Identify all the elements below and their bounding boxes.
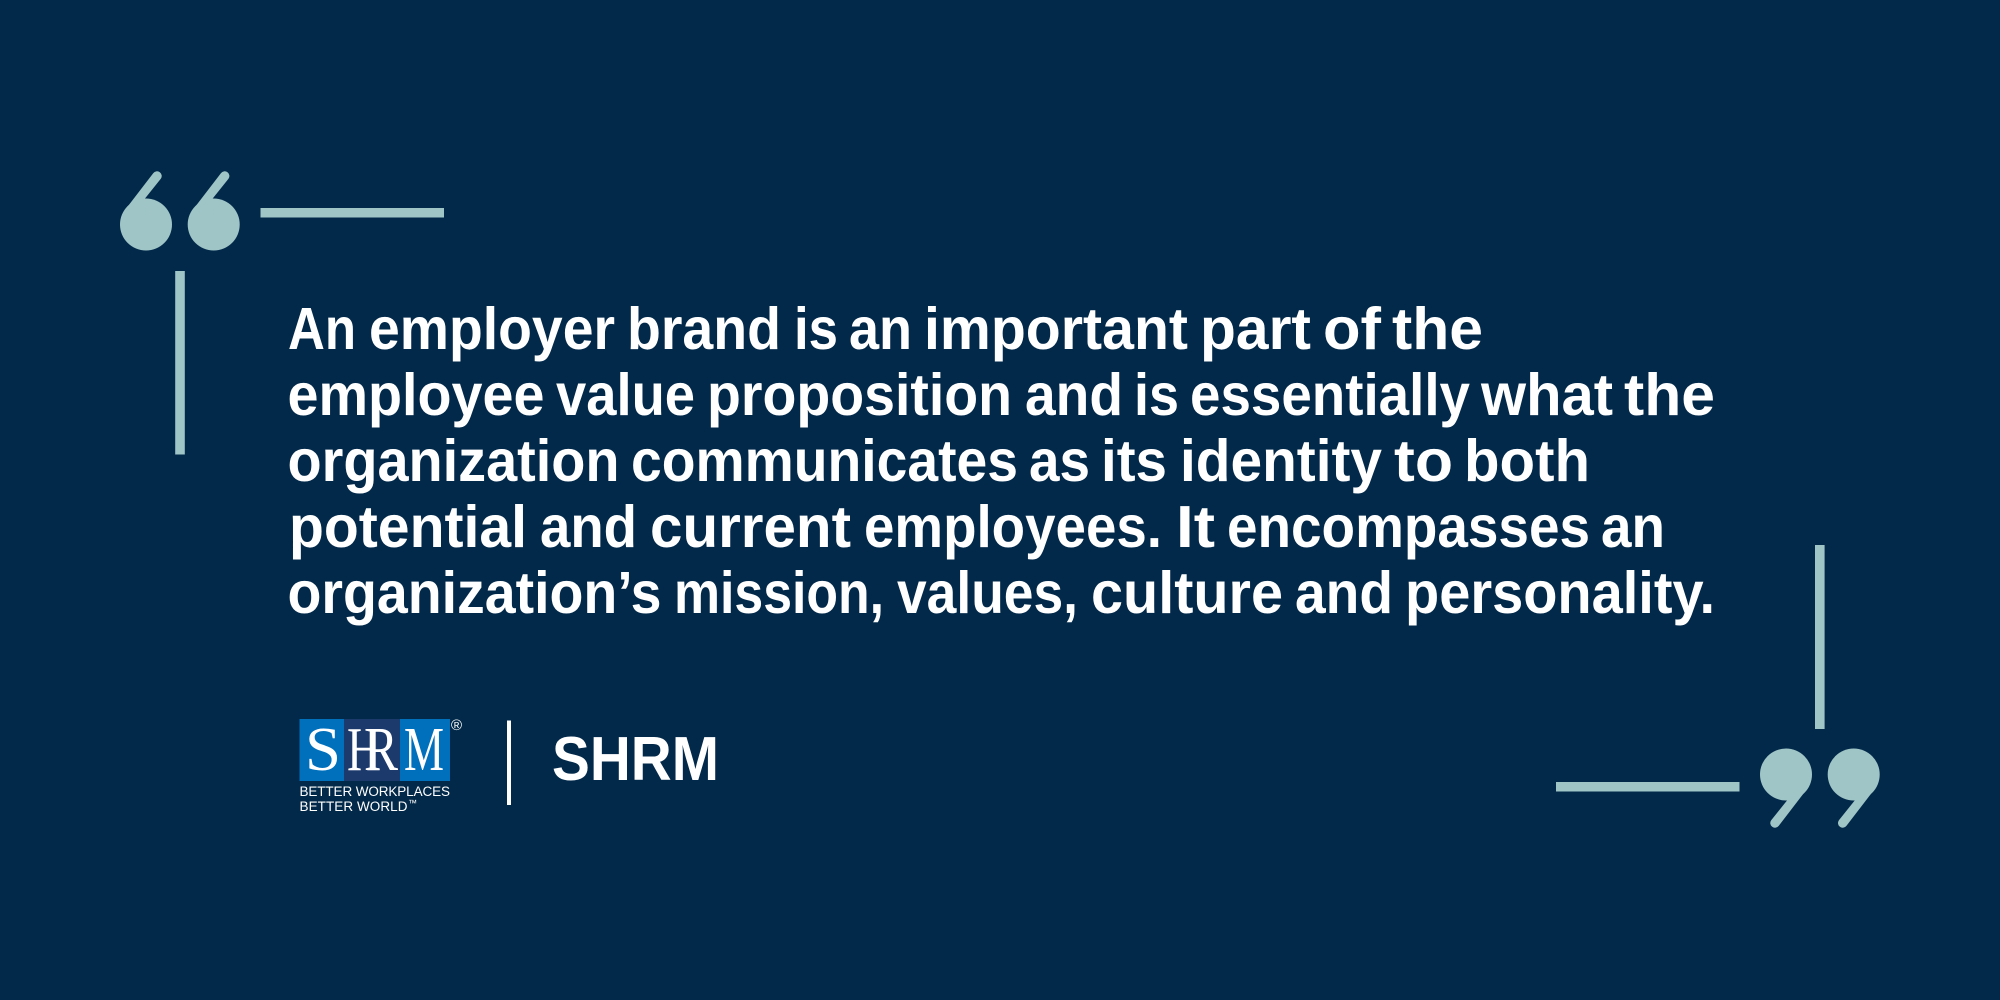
quote text: the (1392, 296, 1483, 362)
logo letters: R (364, 716, 399, 784)
quote text: of (1323, 296, 1381, 362)
logo divider (507, 720, 511, 805)
quote text: part (1200, 296, 1311, 362)
quote text: values, (897, 560, 1078, 626)
quote text: employees. (864, 494, 1162, 560)
quote text: is (1134, 362, 1179, 428)
quote text: an (1601, 494, 1665, 560)
quote text: personality. (1405, 560, 1715, 626)
quote text: culture (1091, 560, 1283, 626)
logo dark centre panel (344, 719, 400, 781)
quote text: what (1480, 362, 1613, 428)
quote text: and (540, 494, 637, 560)
bottom horizontal rule (1556, 782, 1740, 792)
logo letters: M (404, 716, 444, 784)
left vertical rule (175, 271, 185, 454)
logo tagline: BETTER WORLD (300, 799, 408, 814)
quote text: is (794, 296, 838, 362)
quote text: the (1624, 362, 1715, 428)
quote text: an (849, 296, 912, 362)
quote text: organization (288, 428, 620, 494)
registered mark: ® (451, 717, 462, 734)
quote text: proposition (707, 362, 1012, 428)
SHRM logo (300, 716, 462, 814)
quote text: essentially (1190, 362, 1470, 428)
top horizontal rule (260, 208, 444, 218)
quote text: identity (1180, 428, 1382, 494)
quote text: An (288, 296, 356, 362)
quote text: communicates (631, 428, 1018, 494)
quote text: brand (627, 296, 781, 362)
quote text: mission, (674, 560, 884, 626)
right vertical rule (1815, 545, 1825, 729)
quote text (288, 296, 1715, 626)
quote text: important (924, 296, 1188, 362)
logo tagline (300, 784, 450, 814)
logo blue box (300, 719, 450, 781)
source name: SHRM (552, 725, 719, 794)
quote text: employee (288, 362, 544, 428)
quote text: and (1025, 362, 1123, 428)
quote text: both (1464, 428, 1590, 494)
quote text: It (1176, 494, 1215, 560)
logo letters (305, 716, 444, 784)
logo tagline: ™ (408, 798, 417, 808)
quote text: employer (369, 296, 615, 362)
icon: closing quotation marks (1760, 748, 1880, 828)
quote text: to (1394, 428, 1453, 494)
quote text: its (1101, 428, 1167, 494)
quote text: and (1295, 560, 1393, 626)
quote text: as (1029, 428, 1090, 494)
quote text: organization’s (288, 560, 662, 626)
icon: opening quotation marks (120, 171, 240, 250)
logo letters: S (305, 716, 341, 784)
logo letters: H (347, 716, 381, 784)
quote text: current (650, 494, 851, 560)
quote text: value (556, 362, 695, 428)
quote text: potential (289, 494, 527, 560)
logo tagline: BETTER WORKPLACES (300, 784, 450, 799)
quote text: encompasses (1227, 494, 1590, 560)
